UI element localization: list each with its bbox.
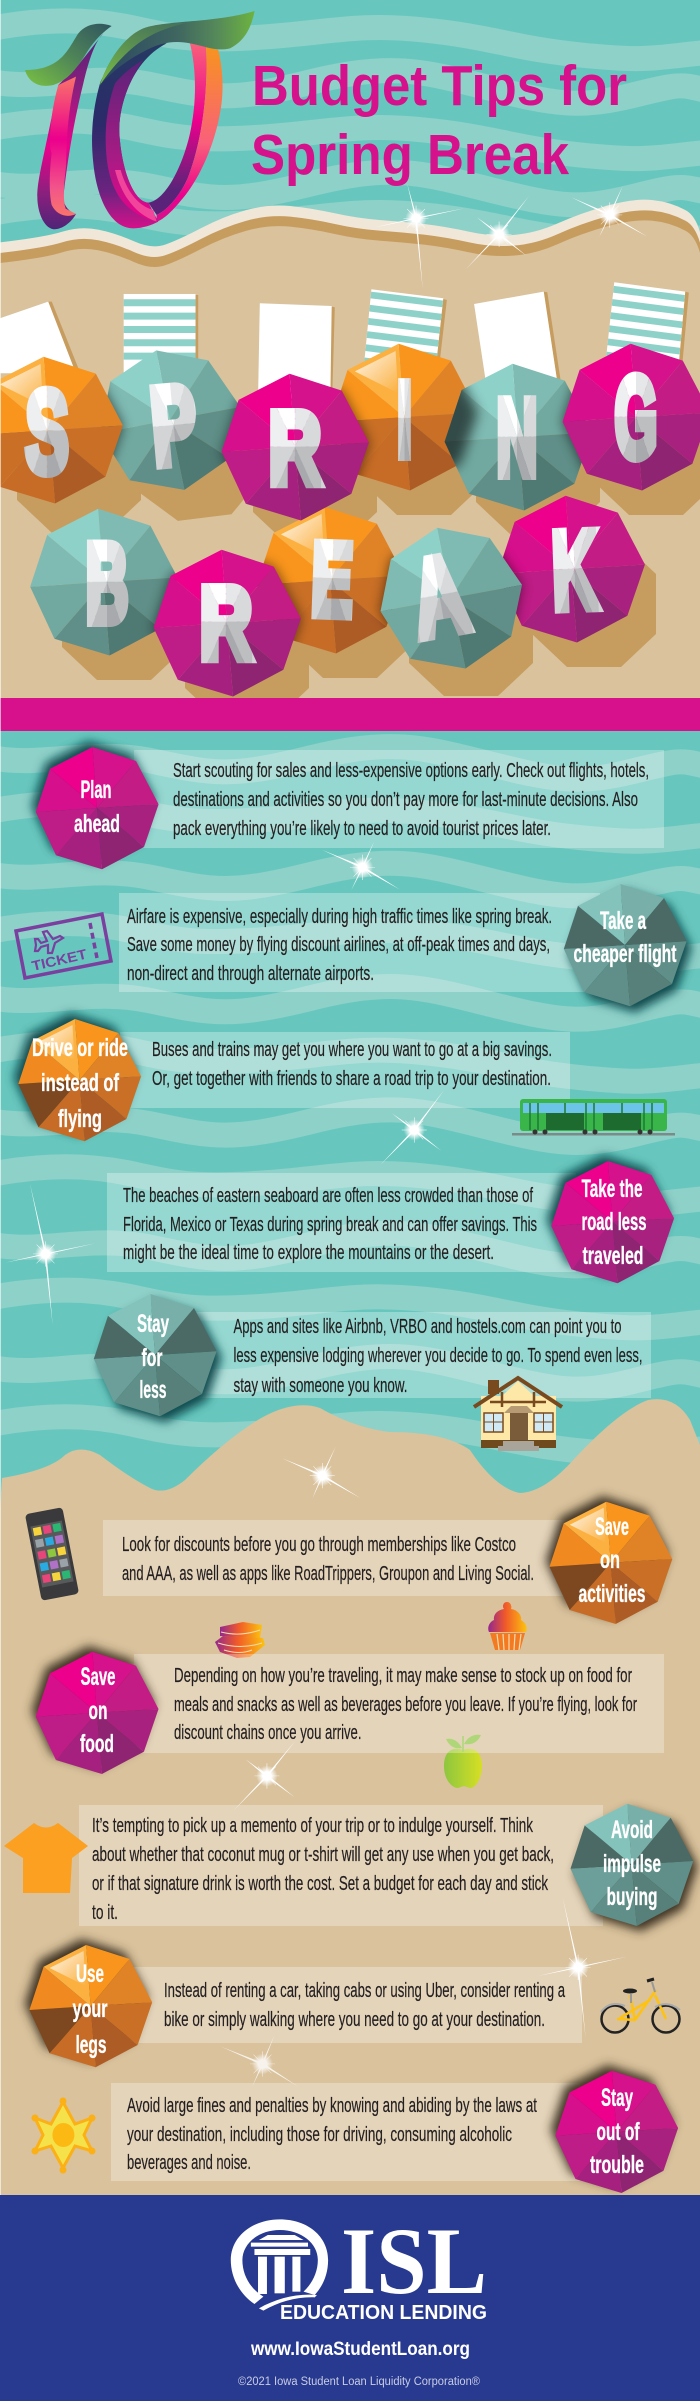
footer bbox=[0, 2195, 700, 2401]
logo emblem bbox=[231, 2219, 328, 2311]
badge label: Take a bbox=[600, 907, 647, 935]
umbrella badge bbox=[18, 1019, 141, 1141]
letter I: I bbox=[397, 360, 412, 479]
umbrella badge bbox=[555, 2071, 678, 2193]
icon: ticket: TICKET bbox=[30, 946, 89, 974]
badge label bbox=[80, 1663, 116, 1758]
badge label: buying bbox=[606, 1883, 658, 1911]
badge label bbox=[582, 1175, 646, 1270]
badge label: Stay bbox=[137, 1310, 169, 1338]
umbrella shadow bbox=[32, 741, 155, 863]
icon: smartphone bbox=[25, 1507, 79, 1601]
tip 7: save on food bbox=[32, 1646, 664, 1774]
badge label: ahead bbox=[74, 810, 120, 838]
copyright: ©2021 Iowa Student Loan Liquidity Corporation® bbox=[238, 2376, 481, 2388]
tip 4: road less traveled bbox=[107, 1155, 674, 1283]
graphic: number 10 bbox=[25, 11, 255, 229]
body text bbox=[127, 2094, 537, 2174]
body text: might be the ideal time to explore the mountains or the desert. bbox=[123, 1241, 494, 1264]
tip 6: save on activities bbox=[25, 1496, 672, 1624]
badge label: traveled bbox=[582, 1242, 644, 1270]
tip 2: cheaper flight bbox=[16, 884, 692, 1012]
sparkle bbox=[221, 2035, 298, 2087]
badge label bbox=[578, 1513, 646, 1608]
umbrella shadow bbox=[32, 1646, 155, 1768]
body text: non-direct and through alternate airports. bbox=[127, 962, 374, 985]
letter G: G bbox=[615, 354, 657, 482]
badge label: Save bbox=[80, 1663, 116, 1691]
umbrella shadows on sand bbox=[17, 385, 700, 721]
badge label: Use bbox=[76, 1960, 104, 1988]
badge label: food bbox=[80, 1730, 114, 1758]
badge label: road less bbox=[582, 1208, 646, 1236]
tip 9: use your legs bbox=[25, 1939, 680, 2067]
sparkle bbox=[322, 842, 400, 890]
umbrella badge bbox=[570, 1804, 693, 1926]
body text bbox=[123, 1184, 537, 1264]
badge label: less bbox=[140, 1376, 166, 1404]
body text bbox=[122, 1533, 534, 1585]
title bbox=[251, 54, 627, 187]
badge label bbox=[74, 776, 120, 838]
umbrella badge bbox=[36, 1652, 159, 1774]
umbrella: K bbox=[503, 496, 645, 642]
badge label bbox=[590, 2084, 644, 2179]
umbrella: I bbox=[340, 344, 470, 490]
badge label: impulse bbox=[603, 1850, 661, 1878]
badge label: Drive or ride bbox=[32, 1034, 128, 1062]
body text bbox=[164, 1979, 565, 2031]
letter K: K bbox=[550, 508, 599, 632]
icon: cupcake bbox=[488, 1602, 527, 1650]
letter E: E bbox=[310, 521, 355, 638]
badge label: Plan bbox=[80, 776, 112, 804]
logo subline: EDUCATION LENDING bbox=[280, 2302, 487, 2324]
umbrella shadow bbox=[569, 890, 692, 1012]
badge label: legs bbox=[76, 2031, 106, 2059]
umbrella badge bbox=[94, 1294, 217, 1416]
body text bbox=[127, 905, 552, 985]
body text: beverages and noise. bbox=[127, 2151, 251, 2174]
icon: t-shirt bbox=[4, 1823, 88, 1893]
umbrella: N bbox=[444, 364, 586, 510]
text panel bbox=[120, 1032, 570, 1108]
badge label: Save bbox=[595, 1513, 629, 1541]
umbrella shadow bbox=[547, 1155, 670, 1277]
icon: apple bbox=[444, 1735, 482, 1788]
umbrella: E bbox=[258, 507, 398, 654]
badge label bbox=[32, 1034, 128, 1133]
umbrella badge bbox=[551, 1161, 674, 1283]
waves in header bbox=[0, 21, 700, 244]
text panel bbox=[134, 1654, 664, 1753]
badge label bbox=[603, 1816, 661, 1911]
icon: sandwich bbox=[215, 1622, 265, 1658]
badge label bbox=[137, 1310, 169, 1404]
water waves, tips area bbox=[0, 747, 700, 1455]
sparkles on shoreline bbox=[375, 183, 647, 289]
badge label: Avoid bbox=[611, 1816, 653, 1844]
letter N: N bbox=[497, 377, 537, 499]
badge label bbox=[72, 1960, 108, 2059]
umbrella: R second bbox=[154, 550, 301, 697]
umbrella badge bbox=[550, 1502, 672, 1624]
badge label: for bbox=[142, 1344, 163, 1372]
icon: bicycle bbox=[601, 1979, 680, 2032]
title: Spring Break bbox=[251, 123, 569, 187]
body text: to it. bbox=[92, 1901, 118, 1924]
badge label: flying bbox=[58, 1105, 102, 1133]
badge label: out of bbox=[596, 2118, 640, 2146]
tip 3: drive or ride bbox=[14, 1013, 675, 1141]
tip 1: plan ahead bbox=[32, 741, 664, 869]
umbrella: G bbox=[563, 344, 700, 491]
tip 5: stay for less bbox=[94, 1294, 651, 1451]
badge label: Take the bbox=[582, 1175, 643, 1203]
website url: www.IowaStudentLoan.org bbox=[250, 2339, 470, 2360]
body text: your destination, including those for driving, consuming alcoholic bbox=[127, 2123, 512, 2146]
badge label: your bbox=[72, 1995, 108, 2023]
sparkle bbox=[380, 1090, 444, 1165]
text panel bbox=[134, 750, 664, 848]
sparkle bbox=[282, 1447, 361, 1498]
umbrella badge bbox=[29, 1945, 152, 2067]
letter R: R bbox=[269, 391, 321, 505]
letter S: S bbox=[25, 367, 69, 497]
badge label: on bbox=[88, 1697, 108, 1725]
icon: ticket bbox=[16, 914, 111, 978]
umbrella: S bbox=[0, 357, 123, 504]
title: Budget Tips for bbox=[252, 54, 627, 118]
text panel bbox=[79, 1805, 603, 1926]
text panel bbox=[103, 1520, 576, 1596]
badge label: activities bbox=[578, 1580, 646, 1608]
letter P: P bbox=[146, 364, 201, 489]
beach shoreline bbox=[0, 200, 700, 721]
text panel bbox=[134, 1967, 582, 2043]
umbrella shadow bbox=[25, 1939, 148, 2061]
body text: stay with someone you know. bbox=[234, 1374, 408, 1397]
umbrella: P bbox=[101, 350, 238, 490]
letter R second: R bbox=[200, 566, 252, 680]
sparkle bbox=[233, 1741, 296, 1811]
umbrella shadow bbox=[546, 1496, 669, 1618]
icon: tram bbox=[512, 1099, 675, 1136]
text panel bbox=[119, 893, 600, 992]
umbrella shadow bbox=[14, 1013, 137, 1135]
umbrella badge bbox=[564, 884, 687, 1006]
umbrella shadow bbox=[575, 1809, 698, 1931]
badge label: trouble bbox=[590, 2151, 644, 2179]
left edge line bbox=[0, 0, 1, 2196]
umbrella: B bbox=[30, 508, 176, 656]
icon: house bbox=[474, 1378, 562, 1451]
text panel bbox=[107, 1173, 576, 1272]
logo wordmark ISL: ISL bbox=[341, 2208, 487, 2314]
umbrella: A bbox=[371, 518, 531, 678]
body text: discount chains once you arrive. bbox=[174, 1721, 362, 1744]
text panel bbox=[196, 1312, 651, 1398]
letter A: A bbox=[403, 532, 476, 661]
body text bbox=[92, 1814, 554, 1924]
badge label bbox=[574, 907, 677, 968]
icon: sheriff star bbox=[32, 2098, 96, 2174]
beach towels bbox=[0, 282, 696, 400]
body text bbox=[152, 1038, 552, 1090]
umbrella badge bbox=[36, 747, 159, 869]
badge label: on bbox=[600, 1546, 620, 1574]
badge label: instead of bbox=[41, 1069, 119, 1097]
sparkle bbox=[538, 1897, 627, 2038]
umbrella shadow bbox=[551, 2065, 674, 2187]
SPRING BREAK umbrella letters bbox=[0, 341, 700, 697]
sand lower section bbox=[0, 1399, 700, 2200]
footer band bbox=[0, 2195, 700, 2401]
umbrella shadow bbox=[99, 1300, 222, 1422]
magenta band bbox=[0, 698, 700, 731]
header water background bbox=[0, 0, 700, 1520]
badge label: Stay bbox=[601, 2084, 633, 2112]
text panel bbox=[111, 2083, 580, 2181]
letter B: B bbox=[86, 521, 128, 646]
body text bbox=[174, 1664, 637, 1744]
sparkle bbox=[5, 1183, 95, 1325]
tip 8: avoid impulse buying bbox=[4, 1804, 698, 1931]
body text bbox=[234, 1315, 642, 1397]
tip 10: stay out of trouble bbox=[32, 2065, 678, 2193]
body text bbox=[173, 759, 649, 840]
umbrella: R bbox=[222, 374, 369, 521]
